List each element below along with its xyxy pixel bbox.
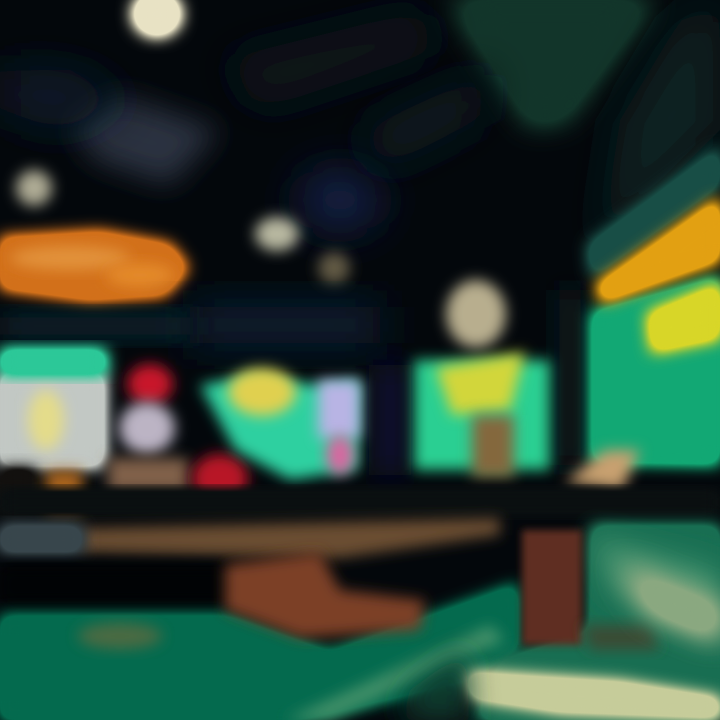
- ceiling: dark tones: [0, 0, 720, 250]
- red and white figure: [108, 364, 248, 502]
- wooden stool and base: [225, 552, 425, 638]
- ceiling lights: [16, 0, 350, 284]
- floor light streaks: [285, 565, 720, 720]
- slot machine bank: centre right: [414, 280, 550, 477]
- green carpet floor: [0, 526, 720, 720]
- wooden table: [0, 518, 500, 603]
- dark blue mid wall band: [0, 290, 582, 475]
- wooden post: [522, 530, 660, 650]
- slot machine bank: left: [0, 350, 106, 514]
- slot machine bank: centre: [200, 368, 360, 480]
- large green wall: right: [565, 147, 720, 490]
- dark counter band: [0, 492, 720, 512]
- orange hanging sign: [0, 232, 188, 300]
